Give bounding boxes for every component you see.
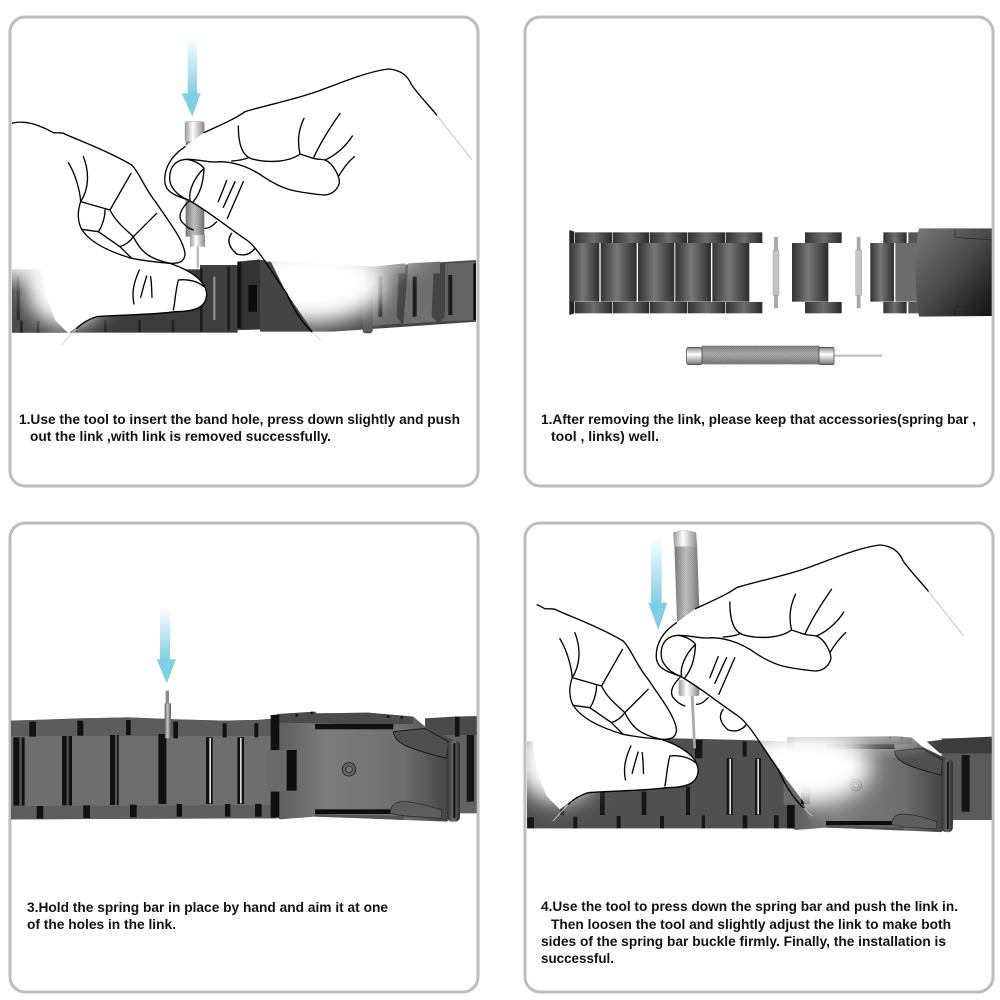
- spring bar right: [856, 237, 862, 308]
- panel 4 caption: sides of the spring bar buckle firmly. Finally, the installation is: [541, 934, 946, 949]
- panel 2 illustration: [569, 228, 992, 365]
- band segment with five links: [569, 230, 762, 315]
- band segment with clasp: [870, 228, 992, 317]
- panel 4 band fades: [517, 718, 930, 805]
- panel 4 caption: 4.Use the tool to press down the spring bar and push the link in.: [541, 899, 958, 914]
- panel 3 caption: of the holes in the link.: [27, 917, 176, 932]
- panel 4 tool: [673, 530, 700, 748]
- panel 4 illustration: [503, 530, 992, 832]
- panel 3 caption: 3.Hold the spring bar in place by hand and aim it at one: [27, 900, 388, 915]
- panel 1 arrow: [182, 37, 201, 117]
- panel 1 hands: [11, 69, 477, 345]
- panel 2 caption: 1.After removing the link, please keep that accessories(spring bar ,: [541, 412, 976, 427]
- panel 4 watch band: [527, 733, 992, 832]
- panel 2: keep accessories: [525, 17, 993, 486]
- link removal tool: [687, 346, 882, 365]
- spring bar left: [773, 237, 779, 308]
- panel 1 watch band: [11, 259, 477, 333]
- panel 1 band fades: [11, 243, 423, 327]
- panel 3 arrow: [157, 607, 176, 683]
- panel 4 hands: [503, 545, 968, 821]
- panel 1 caption: out the link ,with link is removed successfully.: [30, 429, 331, 444]
- panel 4 caption: Then loosen the tool and slightly adjust the link to make both: [551, 917, 951, 932]
- panel 4 caption: [541, 899, 958, 966]
- panel 4: reinstall link: [503, 523, 993, 992]
- removed link: [792, 232, 842, 313]
- panel 3 caption: [27, 900, 388, 932]
- panel 3 watch band: [11, 712, 477, 822]
- panel 1: insert tool and push out link: [10, 17, 478, 486]
- panel 1 caption: 1.Use the tool to insert the band hole, press down slightly and push: [19, 412, 460, 427]
- panel 2 caption: [541, 412, 976, 444]
- panel 3 illustration: [11, 607, 477, 822]
- panel 4 edge mask hiding the cropped wrist: [527, 600, 537, 606]
- panel 1 caption: [19, 412, 460, 444]
- panel 1 illustration: [11, 37, 477, 345]
- panel 2 caption: tool , links) well.: [551, 429, 659, 444]
- panel 4 caption: successful.: [541, 951, 614, 966]
- panel 3: hold spring bar: [10, 523, 478, 992]
- panel 4 arrow: [648, 537, 667, 630]
- panel 1 tool: [185, 122, 205, 268]
- spring bar: [165, 691, 171, 738]
